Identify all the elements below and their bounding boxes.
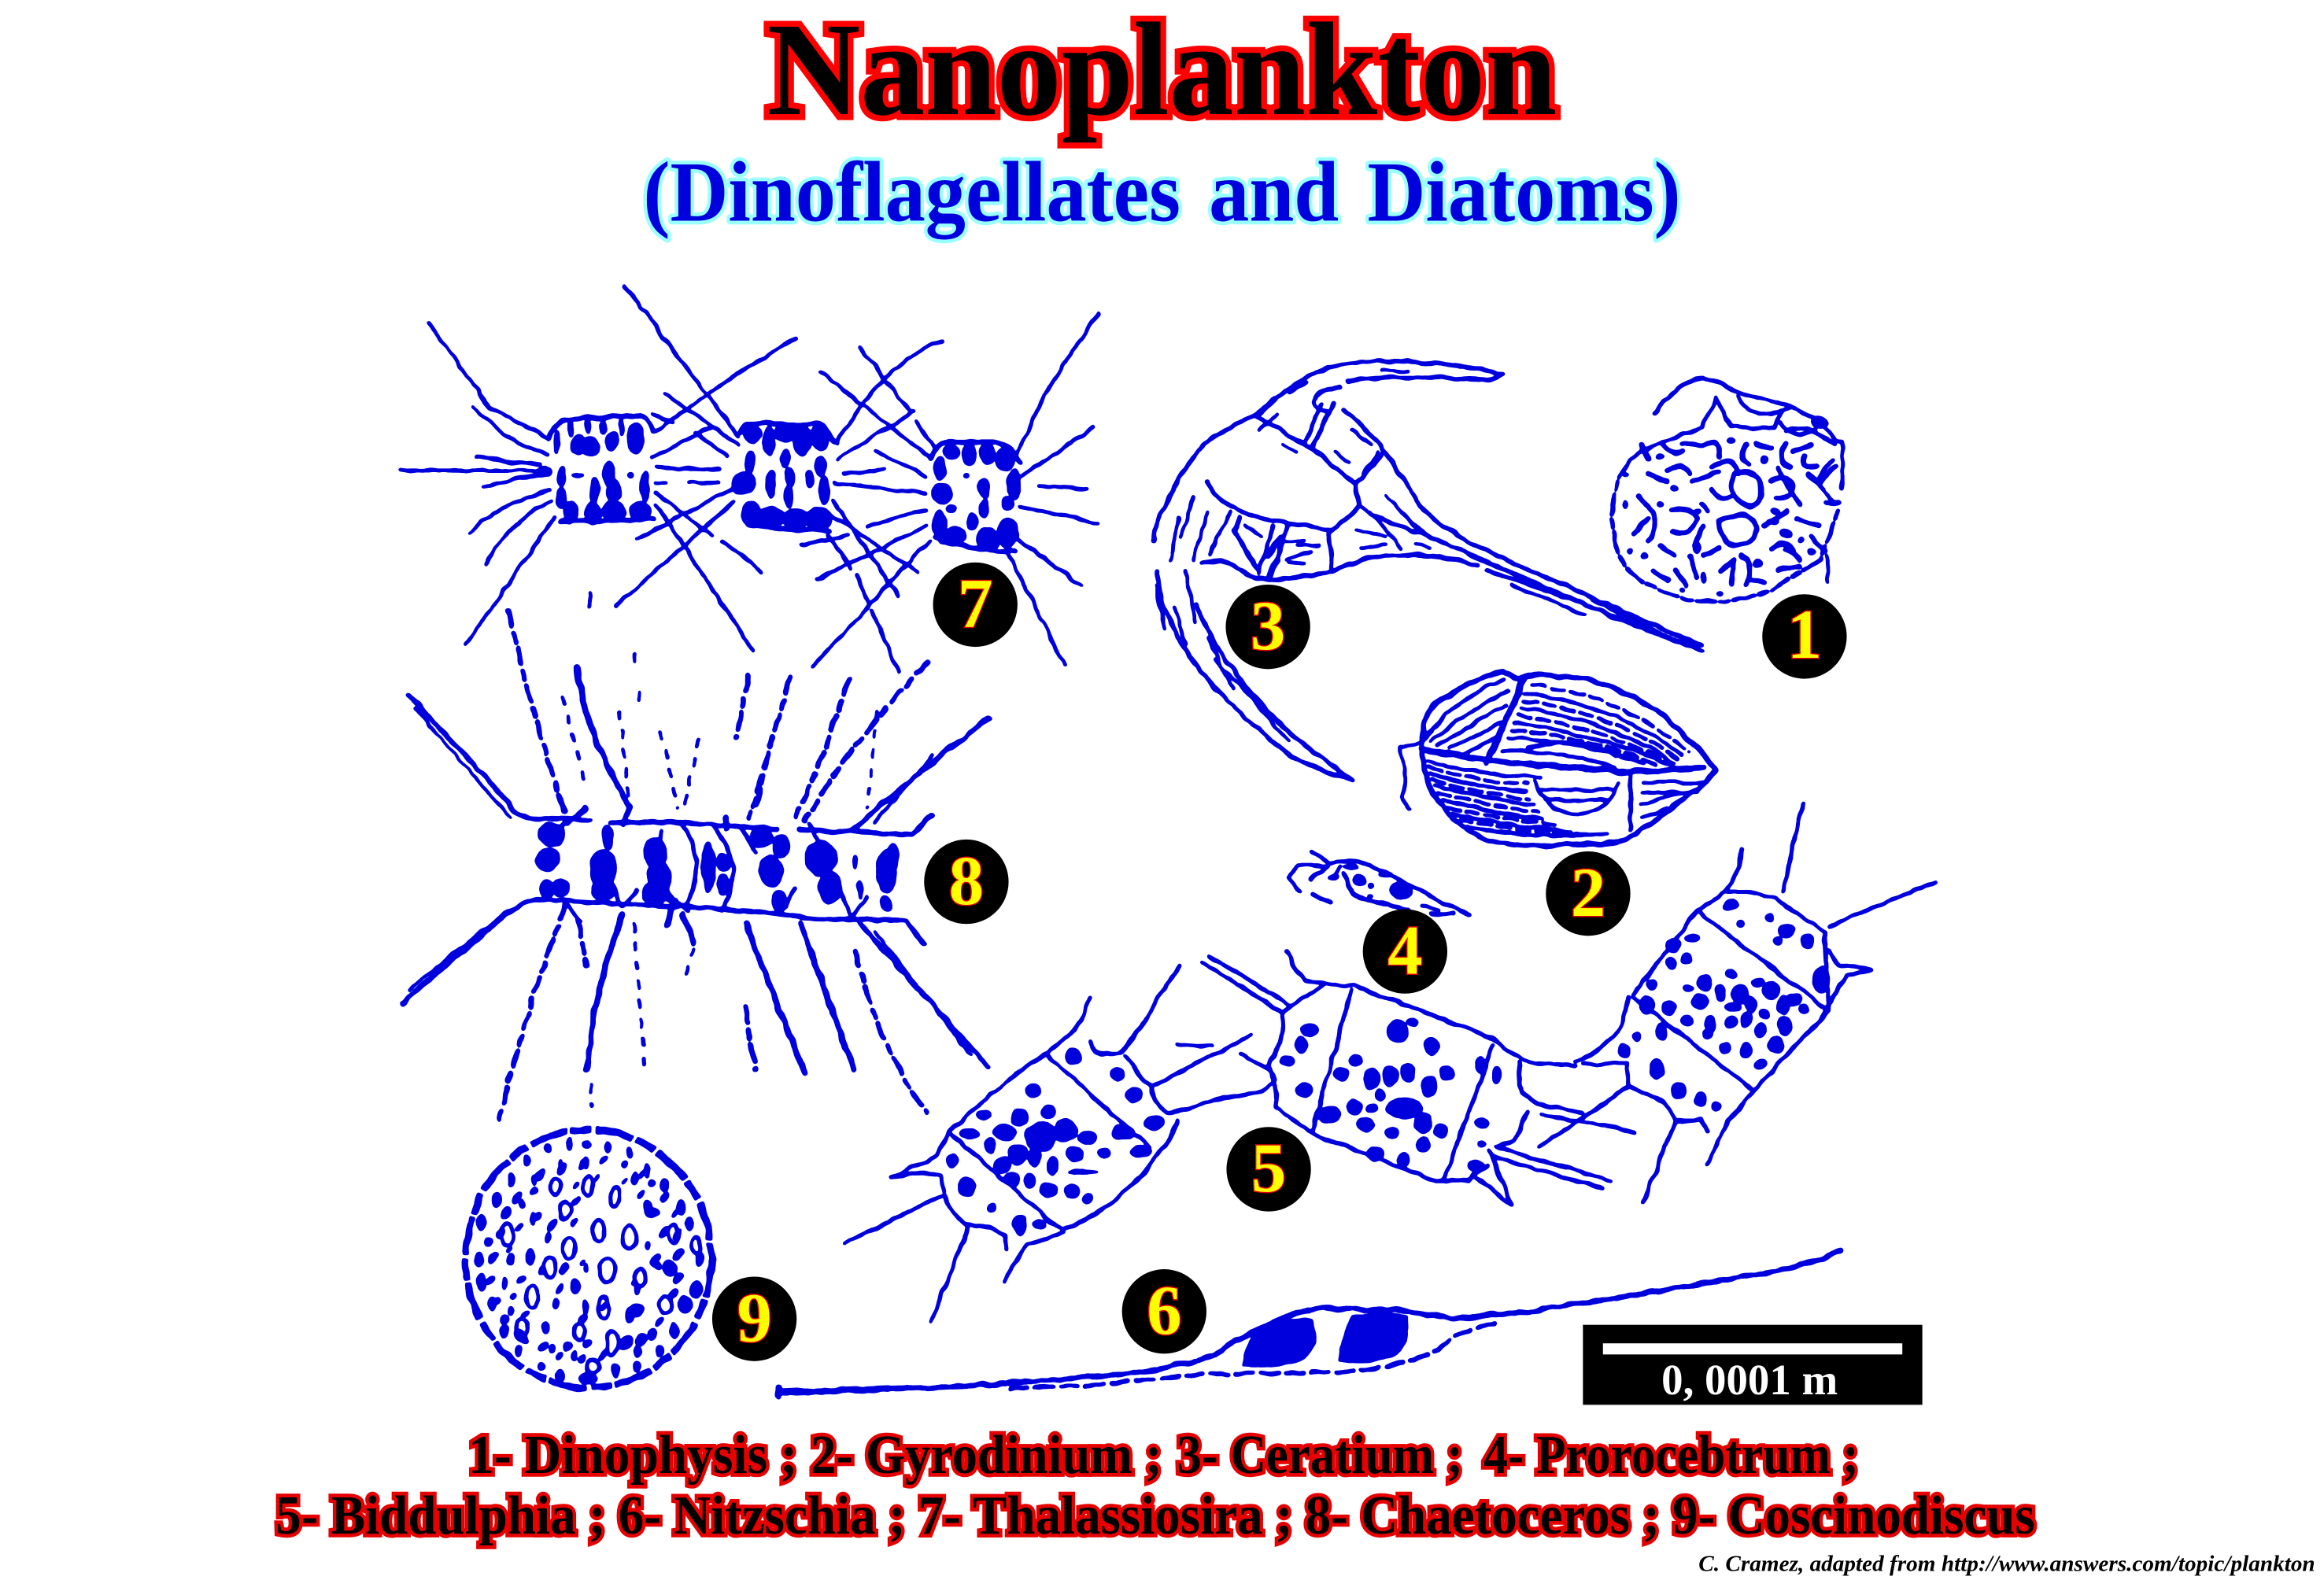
label 1: 1	[1787, 596, 1822, 674]
label 2: 2	[1571, 855, 1605, 932]
credit: C. Cramez, adapted from http://www.answers.com/topic/plankton	[1698, 1552, 2315, 1576]
label 9: 9	[737, 1279, 772, 1357]
species legend line 1: 3- Ceratium ;	[1177, 1425, 1463, 1486]
organism 7: Thalassiosira chain	[400, 286, 1099, 671]
species legend line 1: 1- Dinophysis ;	[468, 1425, 797, 1486]
label 5: 5	[1251, 1130, 1286, 1207]
species legend line 2: 5- Biddulphia ; 6- Nitzschia ; 7- Thalassiosira ; 8- Chaetoceros ; 9- Coscinodiscus	[275, 1486, 2035, 1546]
organism 2: Gyrodinium	[1401, 671, 1716, 846]
organism 8: Chaetoceros chain	[401, 611, 988, 1119]
label 4: 4	[1387, 912, 1422, 989]
label 9	[712, 1276, 796, 1361]
scale bar: 0, 0001 m	[1661, 1356, 1838, 1404]
organism 3: Ceratium	[1153, 361, 1703, 781]
organism 5: Biddulphia chain	[844, 803, 1936, 1322]
right cell of Biddulphia	[1576, 803, 1936, 1202]
organism 6: Nitzschia	[778, 1251, 1841, 1396]
label 3: 3	[1251, 588, 1285, 665]
label 8: 8	[949, 843, 984, 920]
label 6	[1122, 1269, 1206, 1353]
label 3	[1225, 585, 1310, 669]
scale bar	[1583, 1325, 1923, 1405]
label 8	[924, 840, 1009, 924]
subtitle: (Dinoflagellates and Diatoms)	[643, 145, 1681, 240]
label 6: 6	[1147, 1272, 1181, 1349]
label 2	[1546, 851, 1631, 936]
plankton drawings	[400, 286, 1936, 1405]
label 7	[933, 563, 1018, 647]
label 4	[1363, 909, 1447, 994]
species legend line 1	[468, 1425, 1859, 1486]
organism 9: Coscinodiscus	[444, 1116, 731, 1405]
organism 1: Dinophysis	[1613, 378, 1842, 601]
middle cell of Biddulphia	[1202, 951, 1633, 1205]
species legend line 1: 2- Gyrodinium ;	[811, 1425, 1162, 1486]
label 7: 7	[958, 566, 992, 643]
left cell of Biddulphia	[844, 965, 1277, 1322]
species legend line 1: 4- Prorocebtrum ;	[1483, 1425, 1859, 1486]
label 1	[1762, 594, 1847, 679]
organism 4: Prorocentrum	[1288, 851, 1469, 916]
label 5	[1226, 1127, 1311, 1212]
